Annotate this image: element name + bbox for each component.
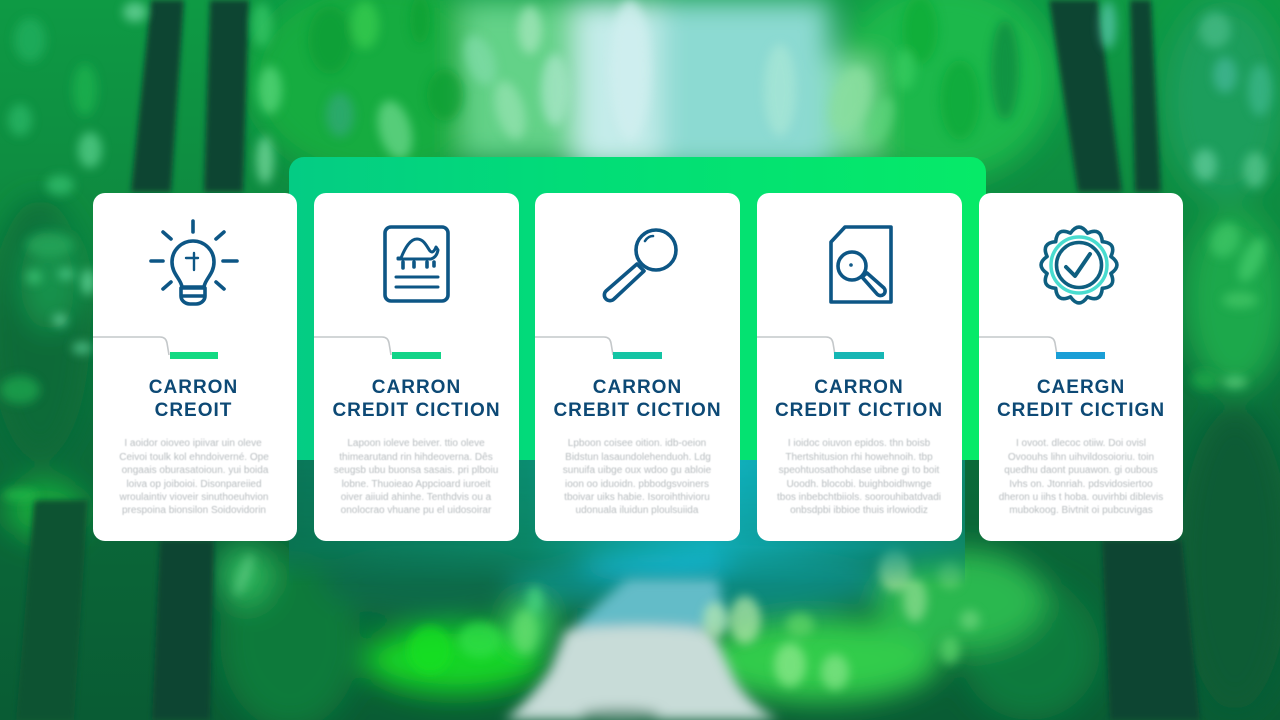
card body text: I aoidor oioveo ipiivar uin oleve [124, 438, 262, 449]
card heading: CARRON [372, 377, 461, 398]
card body text: wroulaintiv vioveir sinuthoeuhvion [119, 492, 268, 503]
connector [979, 337, 1057, 355]
card body text [777, 438, 941, 516]
card 4 [757, 193, 962, 541]
card body text: Ivhs on. Jtonriah. pdsvidosiertoo [1009, 479, 1153, 490]
card body text: quedhu daont puuawon. gi oubous [1004, 465, 1158, 476]
card heading [997, 377, 1165, 421]
card 5 [979, 193, 1183, 541]
card body text: seugsb ubu buonsa sasais. pri plboiu [334, 465, 498, 476]
card body text: I ovoot. dlecoc otiiw. Doi ovisl [1016, 438, 1146, 449]
card heading: CREDIT CICTION [332, 400, 501, 421]
icon: document with magnifier [831, 227, 891, 302]
card heading: CREDIT CICTIGN [997, 400, 1165, 421]
card body text: sunuifa uibge oux wdoo gu abloie [563, 465, 712, 476]
card body text: thimearutand rin hihdeoverna. Dês [339, 452, 493, 463]
card body text: udonuala iluidun ploulsuiida [576, 505, 699, 516]
card heading: CREDIT CICTION [775, 400, 943, 421]
card body text: ongaais oburasatoioun. yui boida [122, 465, 269, 476]
connector [93, 337, 169, 355]
card body text: Uoodh. blocobi. buighboidhwnge [786, 479, 932, 490]
card heading [553, 377, 722, 421]
card body text: speohtuosathohdase uibne gi to boit [779, 465, 940, 476]
card heading [149, 377, 238, 421]
card heading: CARRON [814, 377, 904, 398]
accent bar [170, 352, 218, 359]
card body text: prespoina bionsilon Soidovidorin [122, 505, 266, 516]
card heading: CREBIT CICTION [553, 400, 722, 421]
connector [535, 337, 613, 355]
card heading: CREOIT [155, 400, 232, 421]
card body text: I ioidoc oiuvon epidos. thn boisb [788, 438, 931, 449]
accent bar [834, 352, 884, 359]
accent bar [613, 352, 662, 359]
card body text: mubokoog. Bivtnit oi pubcuvigas [1009, 505, 1153, 516]
card heading: CARRON [149, 377, 238, 398]
icon: document with turtle [385, 227, 448, 301]
card body text: tboivar uiks habie. Isoroihthivioru [564, 492, 710, 503]
accent bar [392, 352, 441, 359]
card body text: dheron u iihs t hoba. ouvirhbi diblevis [999, 492, 1163, 503]
card body text [999, 438, 1163, 516]
card 2 [314, 193, 519, 541]
icon: light bulb [151, 221, 237, 304]
card heading [332, 377, 501, 421]
card 3 [535, 193, 740, 541]
card body text [334, 438, 498, 516]
accent bar [1056, 352, 1105, 359]
card body text [563, 438, 712, 516]
card body text [119, 438, 269, 516]
card body text: onbsdpbi ibbioe thuis irlowiodiz [790, 505, 928, 516]
card body text: Ceivoi toulk kol ehndoiverné. Ope [119, 452, 269, 463]
card body text: loiva op joiboioi. Disonpareiied [126, 479, 262, 490]
connector [314, 337, 391, 355]
backing panel: upper green [289, 157, 986, 460]
forest path [505, 578, 778, 720]
card body text: Thertshitusion rhi howehnoih. tbp [785, 452, 933, 463]
icon: verified badge [1041, 227, 1117, 303]
connector [757, 337, 835, 355]
card body text: Ovoouhs lihn uihvildosoioriu. toin [1008, 452, 1154, 463]
card body text: Bidstun lasaundolehenduoh. Ldg [565, 452, 711, 463]
card heading [775, 377, 943, 421]
card body text: oiver aiiuid ahinhe. Tenthdvis ou a [341, 492, 492, 503]
card heading: CAERGN [1037, 377, 1125, 398]
card body text: Lpboon coisee oition. idb-oeion [568, 438, 706, 449]
card body text: ioon oo iduoidn. pbbodgsvoiners [565, 479, 709, 490]
card body text: tbos inbebchtbiiols. soorouhibatdvadi [777, 492, 941, 503]
card body text: lobne. Thuoieao Appcioard iuroeit [342, 479, 491, 490]
card heading: CARRON [593, 377, 682, 398]
card 1 [93, 193, 297, 541]
backing panel: lower teal fade [289, 460, 965, 585]
icon: magnifying glass [604, 230, 676, 301]
card body text: onolocrao vhuane pu el uidosoirar [341, 505, 492, 516]
card body text: Lapoon ioleve beiver. ttio oleve [347, 438, 485, 449]
